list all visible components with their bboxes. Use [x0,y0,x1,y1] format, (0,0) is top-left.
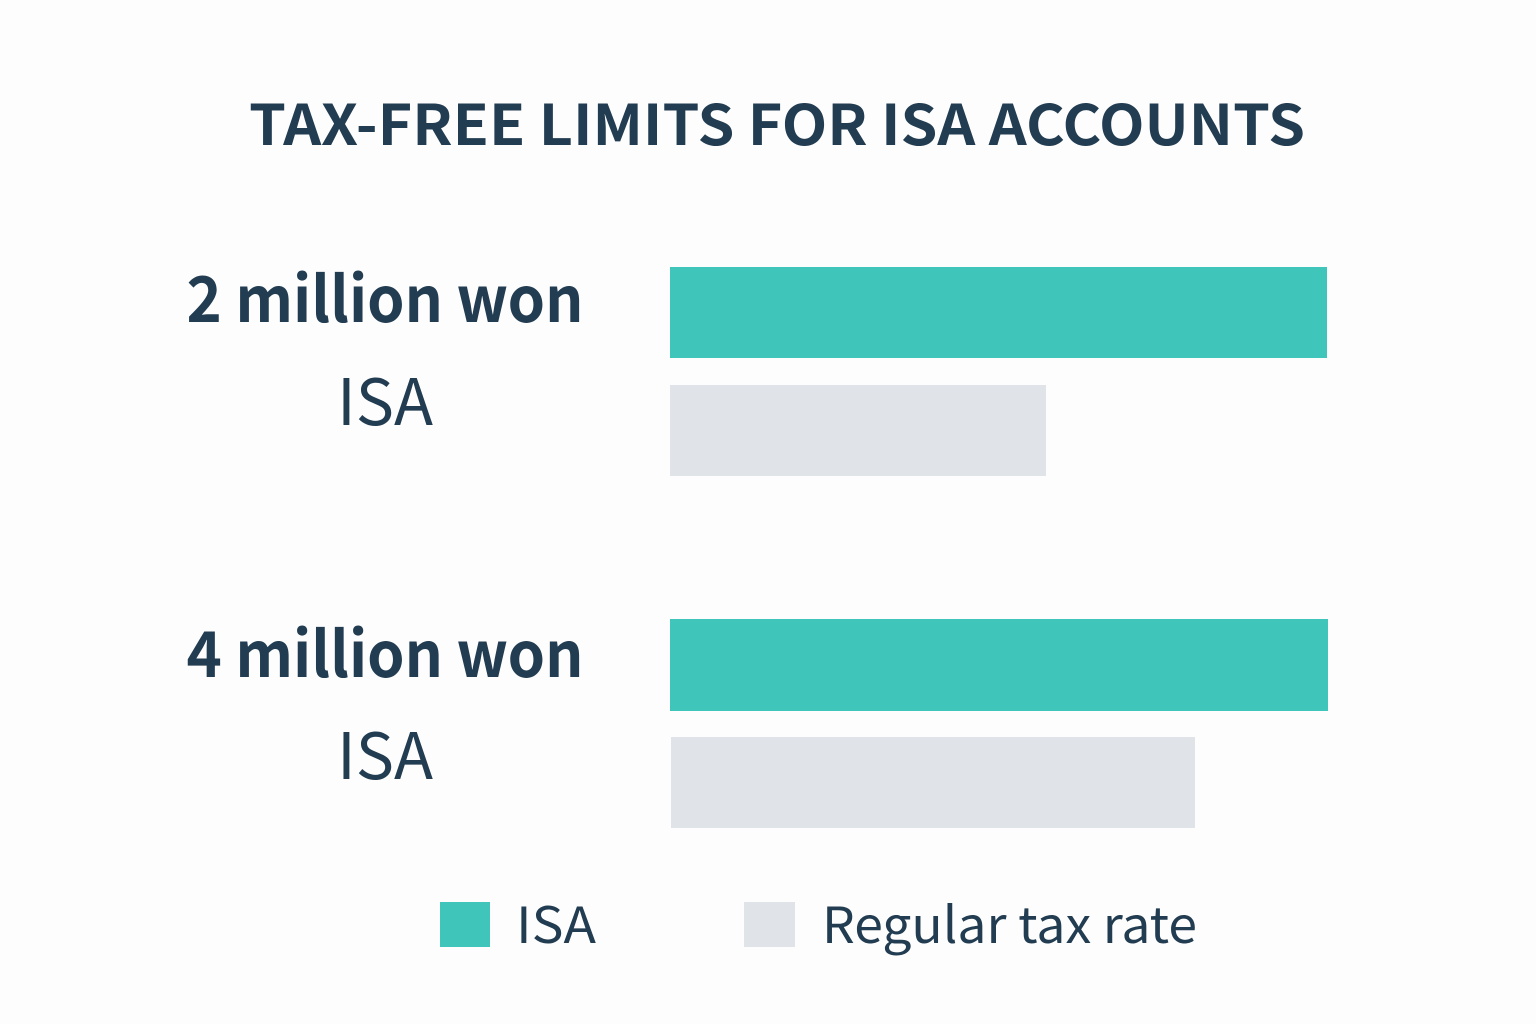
legend [440,886,1197,958]
bar: regular tax rate 2 million [670,385,1046,476]
group: 2 million won [186,250,1327,476]
label: ISA: ISA [337,706,433,798]
legend swatch: regular tax rate [744,902,795,947]
bar: ISA 2 million [670,267,1327,358]
title: TAX-FREE LIMITS FOR ISA ACCOUNTS [249,81,1305,162]
legend swatch: ISA [440,902,490,947]
label: 4 million won: 4 million won [186,605,584,696]
group: 4 million won [186,605,1328,828]
label: 2 million won: 2 million won [186,250,584,341]
legend label: regular tax rate: Regular tax rate [822,886,1197,958]
label: ISA: ISA [337,352,433,444]
bar: regular tax rate 4 million [671,737,1195,828]
legend label: ISA: ISA [516,886,597,958]
bar: ISA 4 million [670,619,1328,711]
